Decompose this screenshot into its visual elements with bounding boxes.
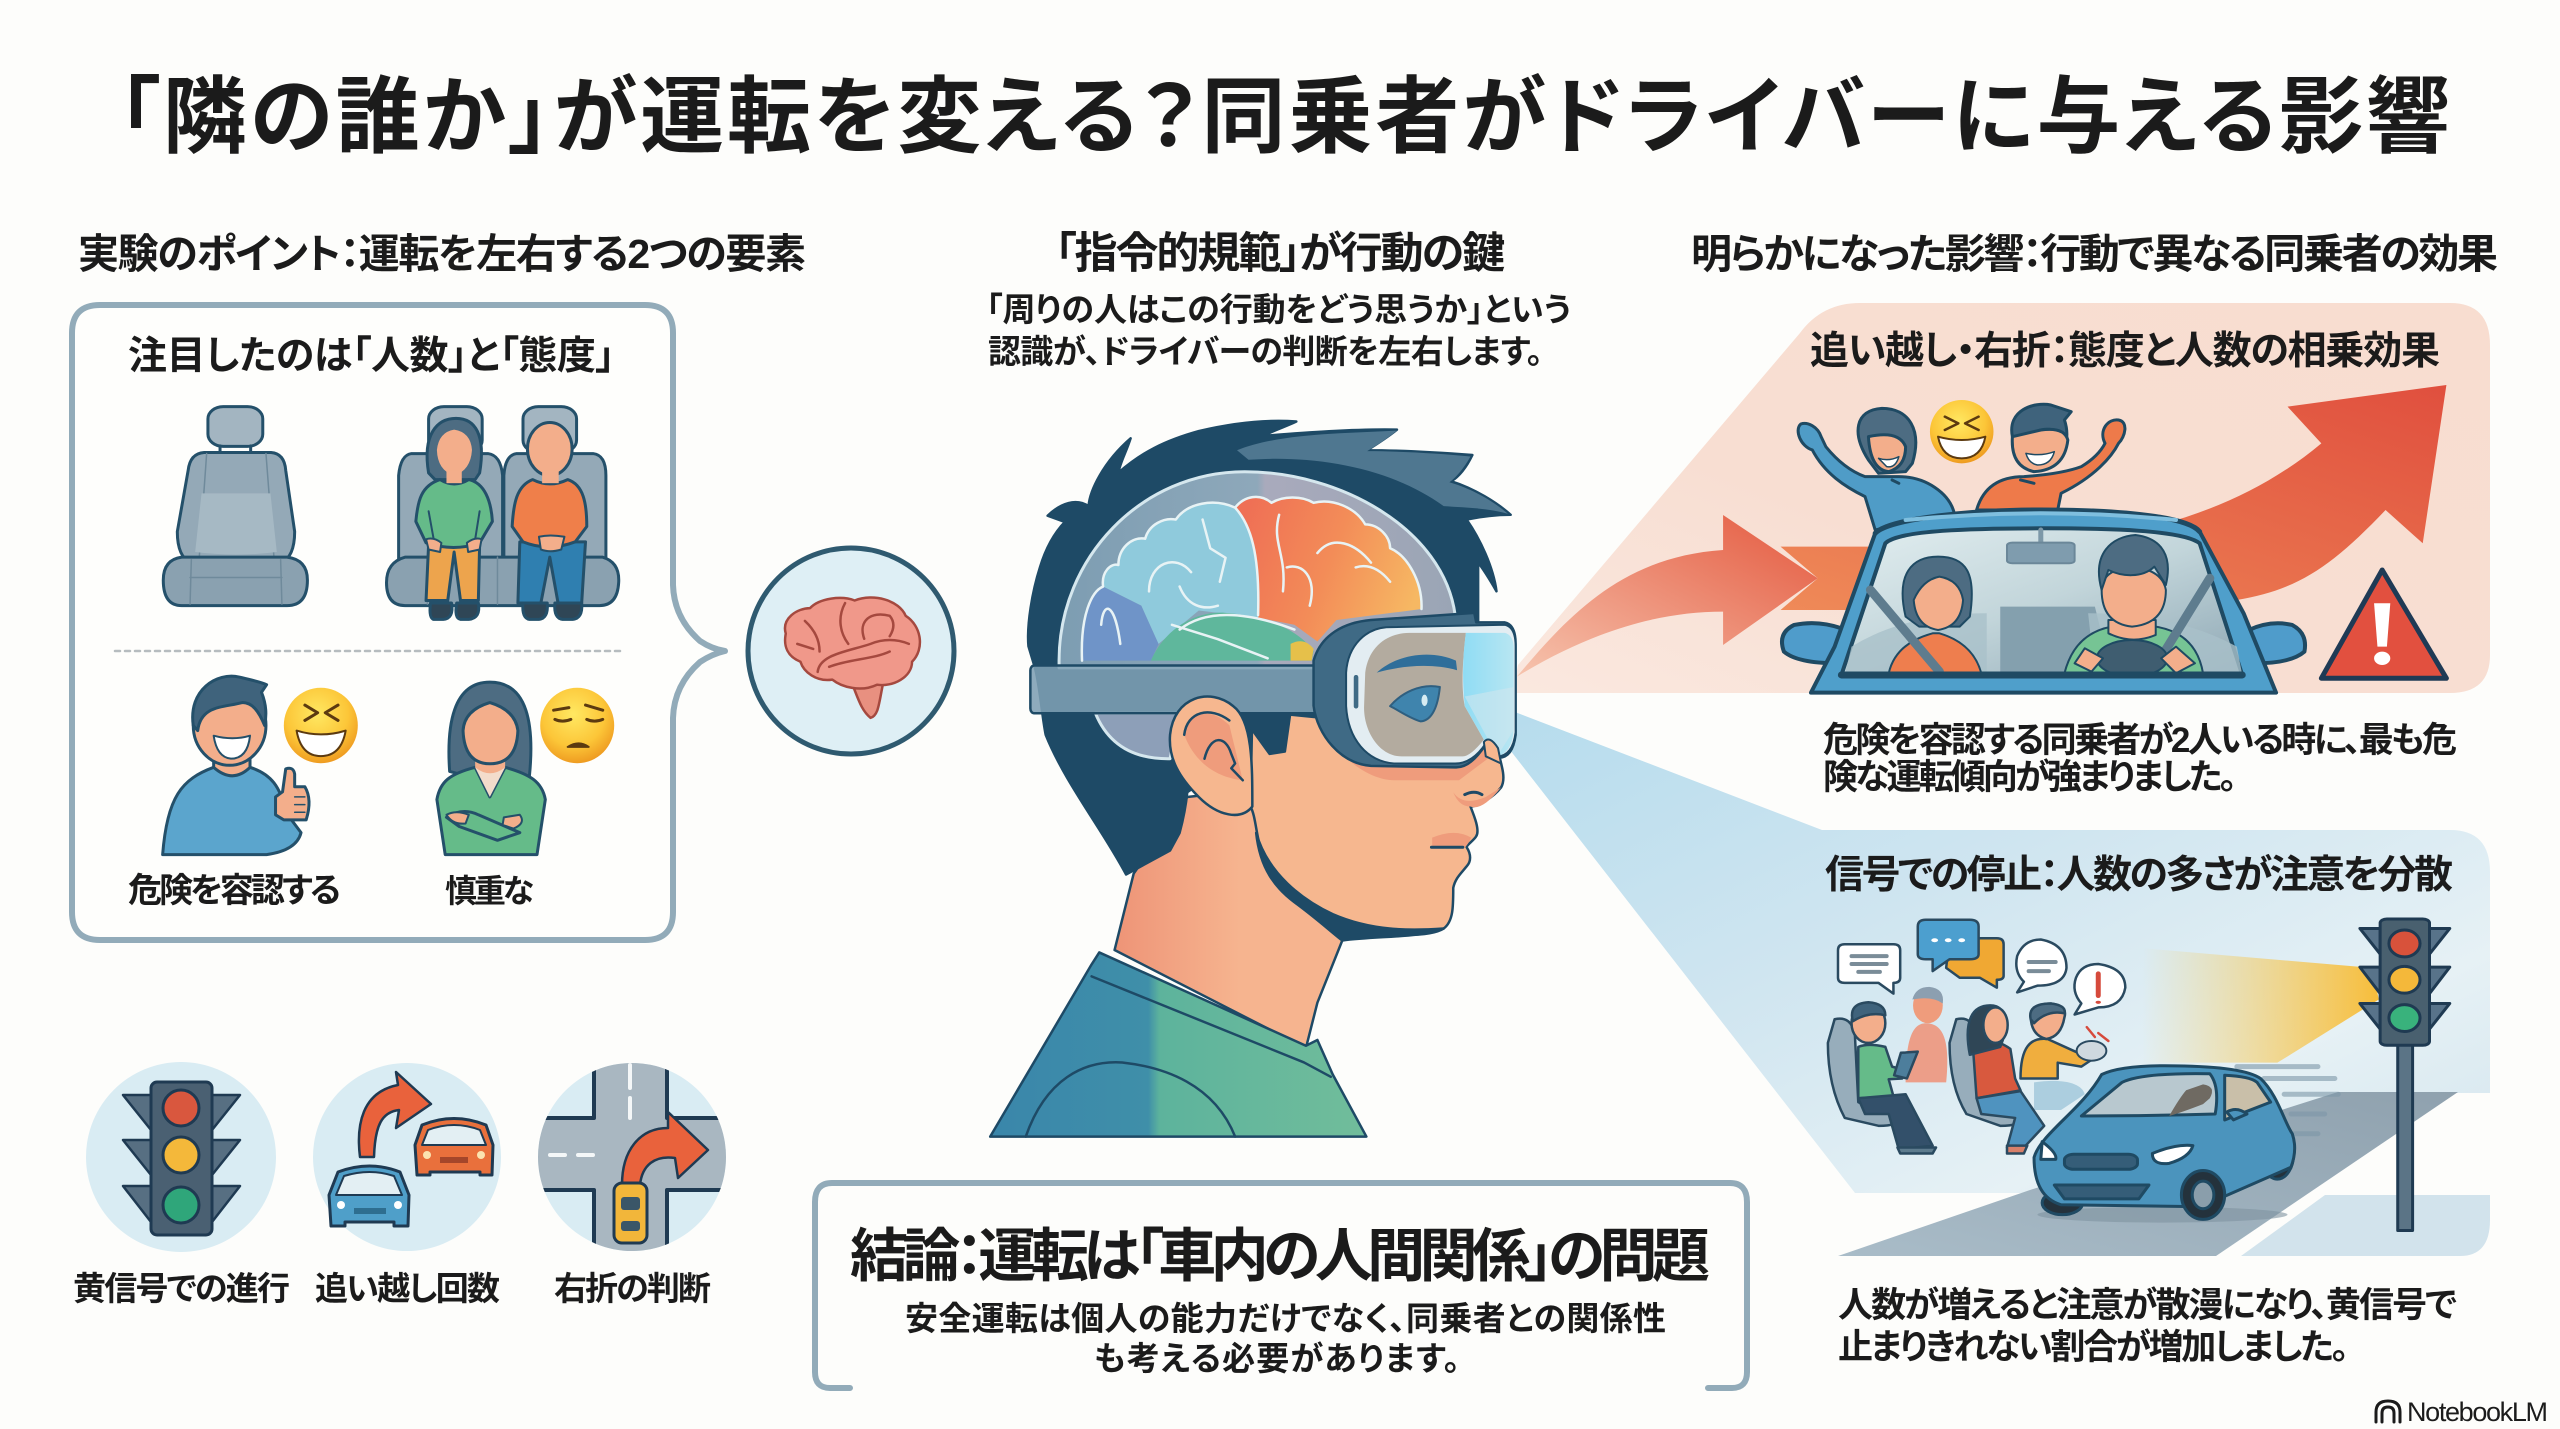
text block: stopping result: 止まりきれない割合が増加しました。 [1838, 1328, 2349, 1367]
heading: experiment points: 実験のポイント：運転を左右する2つの要素 [78, 231, 806, 277]
panel heading: 追い越し・右折：態度と人数の相乗効果 [1810, 330, 2440, 373]
conclusion heading: 結論：運転は「車内の人間関係」の問題 [850, 1224, 1710, 1289]
brain lobes [1082, 497, 1422, 661]
conclusion text [905, 1300, 1666, 1377]
road crossing lower right [2241, 1195, 2490, 1256]
blue car [329, 1166, 409, 1226]
icon: cautious woman [437, 682, 545, 855]
text block: stopping result [1838, 1286, 2457, 1367]
transparent skull window [1059, 472, 1455, 668]
icon: distracted passengers [1828, 987, 2108, 1153]
heading: revealed effects: 明らかになった影響：行動で異なる同乗者の効果 [1691, 231, 2498, 277]
icon: laughing emoji [284, 688, 358, 763]
blue beam background [1510, 712, 2490, 1193]
side hair under band [1249, 711, 1291, 754]
hair [1028, 421, 1511, 874]
arrow [622, 1112, 708, 1185]
conclusion text: も考える必要があります。 [1094, 1340, 1460, 1377]
label: cautious: 慎重な [445, 873, 534, 909]
icon: traffic light [2360, 919, 2450, 1230]
eye [1390, 686, 1440, 721]
yellow car [614, 1183, 647, 1243]
icon: accepting man [163, 676, 309, 855]
panel: conclusion [815, 1183, 1747, 1388]
orange car [415, 1118, 493, 1175]
icon: brain circle [748, 548, 954, 754]
face [1250, 711, 1503, 935]
icon: right turn circle [538, 1063, 726, 1251]
label: yellow light: 黄信号での進行 [73, 1270, 290, 1307]
eyebrow [1377, 655, 1457, 673]
panel heading: 信号での停止：人数の多さが注意を分散 [1825, 854, 2453, 897]
text block: passing result: 危険を容認する同乗者が2人いる時に、最も危 [1823, 721, 2457, 760]
illustration: head with goggles and brain [990, 421, 1516, 1137]
driver [2064, 627, 2203, 673]
jaw shadow [1256, 833, 1444, 940]
icon: cheering passengers [1798, 404, 2125, 530]
icon: warning triangle [2321, 570, 2446, 678]
pink beam background [1510, 303, 2490, 693]
shirt [990, 952, 1366, 1137]
man [518, 542, 586, 603]
icon: speeding car [2034, 1066, 2338, 1223]
goggle shell [1314, 613, 1516, 767]
woman red [1973, 1041, 2021, 1098]
icon: unamused emoji [540, 688, 614, 763]
text block: passing result: 険な運転傾向が強まりました。 [1823, 758, 2237, 797]
conclusion text: 安全運転は個人の能力だけでなく、同乗者との関係性 [905, 1300, 1666, 1337]
road [1838, 1092, 2458, 1256]
divider [115, 650, 625, 652]
text block: passing result [1823, 721, 2457, 797]
under-goggle shadow [1312, 706, 1488, 780]
icon: laughing emoji small [1930, 400, 1993, 463]
strap [1030, 665, 1346, 713]
icon: speech bubbles [1838, 920, 2125, 1015]
hair highlight [1237, 431, 1508, 514]
text block: norm explanation [986, 291, 1571, 370]
seats front [1828, 1019, 1899, 1126]
heading: injunctive norm: 「指令的規範」が行動の鍵 [1055, 230, 1505, 278]
callout outline [72, 305, 725, 940]
lens [1364, 633, 1484, 756]
panel: result for passing and right turn [1510, 303, 2490, 693]
icon: empty seat [163, 407, 307, 606]
icon: two passengers on seats [387, 407, 619, 619]
label: right turn decision: 右折の判断 [554, 1270, 711, 1307]
brain illustration [785, 598, 920, 718]
man green [1858, 1045, 1906, 1098]
icon: traffic light circle [86, 1062, 276, 1252]
title: 「隣の誰か」が運転を変える？同乗者がドライバーに与える影響 [118, 70, 2450, 164]
goggle frame [1346, 625, 1516, 764]
passenger [1889, 633, 1981, 673]
ear [1170, 697, 1252, 815]
text block: stopping result: 人数が増えると注意が散漫になり、黄信号で [1838, 1286, 2457, 1325]
watermark: NotebookLM: NotebookLM [2407, 1397, 2548, 1427]
label: accepting: 危険を容認する [128, 872, 341, 910]
mirror [2038, 530, 2043, 543]
seats and interior [2000, 607, 2112, 675]
panel: result for stopping at signal [1510, 712, 2490, 1256]
chart arrow: rising arrows [1517, 385, 2446, 677]
yellow light beam [2142, 948, 2379, 1063]
icon: car with driver [1782, 510, 2305, 693]
neck [1115, 783, 1342, 1048]
back passengers [1906, 1023, 1947, 1082]
panel: two factors callout [72, 305, 725, 940]
panel heading: 注目したのは「人数」と「態度」 [128, 335, 615, 378]
icon: passing cars circle [313, 1063, 501, 1251]
conclusion frame [815, 1183, 1747, 1388]
label: passing count: 追い越し回数 [315, 1270, 500, 1307]
woman [427, 418, 481, 480]
arrow [359, 1072, 431, 1157]
text block: norm explanation: 認識が、ドライバーの判断を左右します。 [988, 333, 1543, 370]
text block: norm explanation: 「周りの人はこの行動をどう思うか」という [986, 291, 1571, 328]
